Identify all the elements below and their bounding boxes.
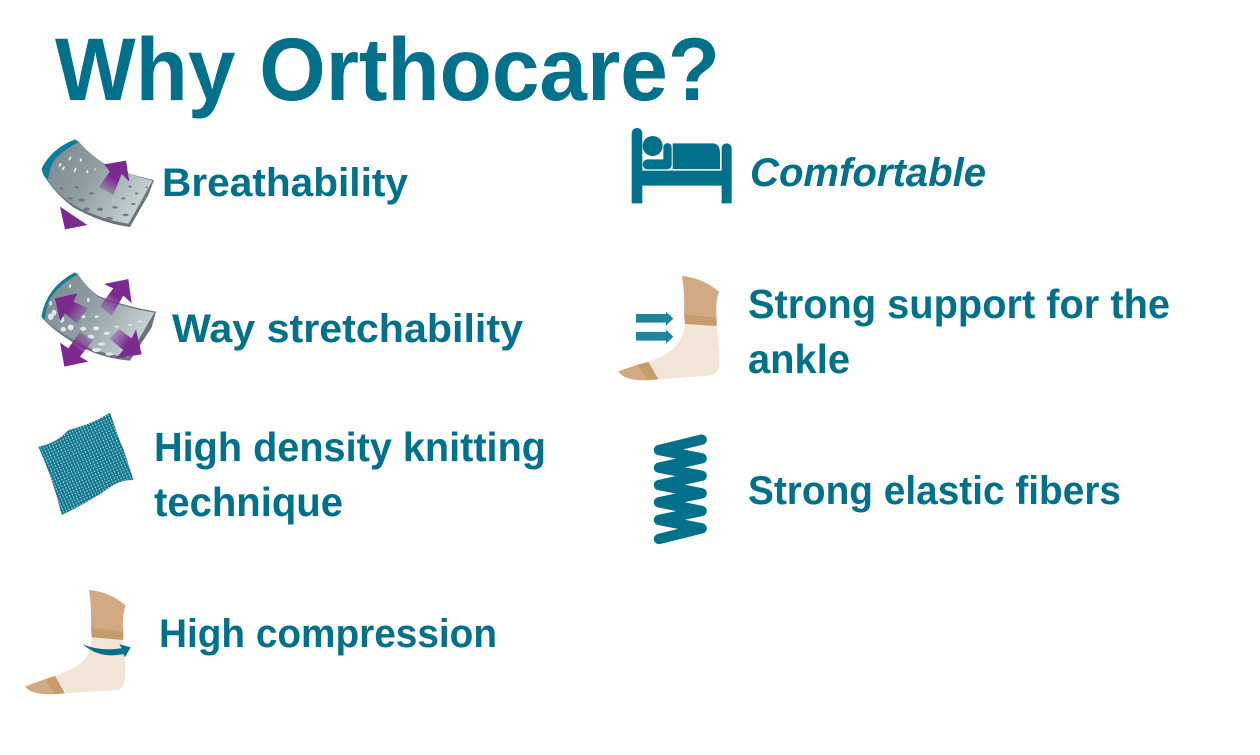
icon: ankle with support arrows (618, 276, 719, 380)
label: strong support for the ankle: Strong support for the (748, 281, 1170, 327)
label: strong support for the ankle: ankle (748, 336, 850, 382)
icon: person in bed (632, 128, 732, 203)
label: high density knitting technique: High density knitting (154, 424, 546, 470)
label: strong support for the ankle (748, 281, 1170, 382)
icon: stretch fabric (41, 272, 156, 367)
icon: ankle with compression arrow (25, 590, 131, 694)
icon: coil spring (659, 440, 702, 539)
icon: breathable fabric (42, 139, 154, 229)
label: way stretchability: Way stretchability (172, 307, 524, 351)
icon: knitted mesh (38, 413, 133, 515)
label: high compression: High compression (159, 612, 497, 656)
label: comfortable: Comfortable (750, 151, 986, 195)
label: high density knitting technique: technique (154, 479, 343, 525)
label: high density knitting technique (154, 424, 546, 525)
label: breathability: Breathability (162, 161, 409, 205)
label: strong elastic fibers: Strong elastic fibers (748, 469, 1121, 513)
title: Why Orthocare? (55, 19, 720, 119)
